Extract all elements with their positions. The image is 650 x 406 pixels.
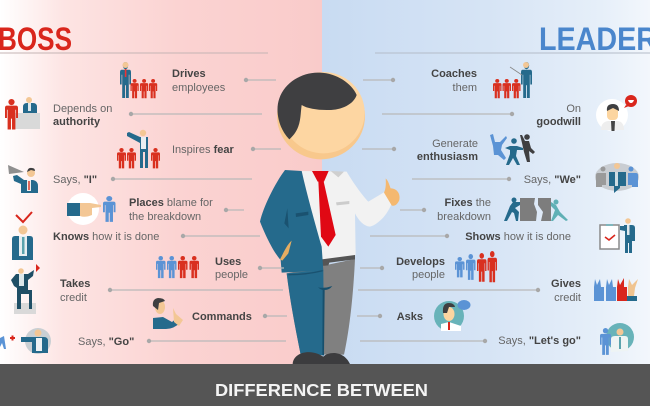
row: says lets go: [360, 335, 581, 347]
icon: boss pointing over employees: [117, 130, 160, 168]
row: develops people: people: [412, 269, 445, 281]
row: gives credit: [358, 278, 581, 304]
row: says we: Says, "We": [524, 174, 581, 186]
row: asks: [357, 311, 423, 323]
row: says we: [412, 174, 581, 186]
row: fixes the breakdown: Fixes the: [444, 197, 491, 209]
row: on goodwill: goodwill: [536, 116, 581, 128]
row: takes credit: Takes: [60, 278, 90, 290]
row: develops people: [360, 256, 445, 281]
footer title: DIFFERENCE BETWEEN: [215, 380, 428, 400]
icon: raised victory hands: [594, 278, 638, 301]
icon: man on step with flag: [11, 264, 40, 314]
row: fixes the breakdown: breakdown: [437, 211, 491, 223]
icon: boss ordering a worker: [0, 328, 51, 354]
icon: leader with clipboard: [600, 218, 635, 253]
row: coaches them: Coaches: [431, 68, 477, 80]
row: develops people: Develops: [396, 256, 445, 268]
row: on goodwill: On: [566, 103, 581, 115]
row: places blame: Places blame for: [129, 197, 213, 209]
icon: coach with pointer and three people: [493, 62, 532, 98]
row: asks: Asks: [397, 311, 423, 323]
row: commands: [192, 311, 287, 323]
row: inspires fear: Inspires fear: [172, 144, 234, 156]
row: depends on authority: [53, 103, 262, 128]
row: says lets go: Says, "Let's go": [498, 335, 581, 347]
row: drives employees: employees: [172, 82, 226, 94]
row: says go: Says, "Go": [78, 336, 134, 348]
icon: three jumping people: [490, 134, 535, 165]
row: shows how: [370, 231, 571, 243]
row: knows how: [53, 231, 260, 243]
icon: man with question bubble: [434, 300, 470, 331]
icon: boss with three employees: [120, 62, 157, 98]
row: generate enthusiasm: [362, 138, 478, 163]
row: gives credit: Gives: [551, 278, 581, 290]
row: drives employees: Drives: [172, 68, 206, 80]
icon: man with megaphone: [8, 165, 38, 193]
row: inspires fear: [172, 144, 281, 156]
heading: BOSS: BOSS: [0, 21, 72, 57]
row: fixes the breakdown: [400, 197, 491, 223]
row: depends on authority: Depends on: [53, 103, 112, 115]
row: places blame: the breakdown: [129, 211, 201, 223]
central figure: half boss, half leader: [260, 72, 400, 364]
row: uses people: [215, 256, 284, 281]
icon: four people: [156, 256, 199, 278]
row: says I: [53, 174, 252, 186]
row: shows how: Shows how it is done: [465, 231, 571, 243]
icon: man before a desk: [5, 97, 40, 129]
row: commands: Commands: [192, 311, 252, 323]
row: places blame: [129, 197, 244, 223]
row: says I: Says, "I": [53, 174, 97, 186]
row: takes credit: [60, 278, 283, 304]
row: uses people: people: [215, 269, 248, 281]
background: boss side: [0, 0, 322, 364]
icon: man pointing: [153, 298, 183, 329]
row: drives employees: [172, 68, 276, 94]
row: generate enthusiasm: Generate: [432, 138, 478, 150]
row: depends on authority: authority: [53, 116, 101, 128]
icon: team group: [595, 163, 639, 193]
row: coaches them: them: [453, 82, 477, 94]
icon: people growing in height: [455, 251, 497, 282]
row: takes credit: credit: [60, 292, 87, 304]
row: uses people: Uses: [215, 256, 241, 268]
icon: pointing hand and blue employee: [67, 193, 116, 225]
row: on goodwill: [382, 103, 581, 128]
row: coaches them: [363, 68, 477, 94]
icon: smiling leader with speech bubble: [596, 95, 637, 131]
footer bar: [0, 364, 650, 406]
row: says go: [78, 336, 286, 348]
row: knows how: Knows how it is done: [53, 231, 159, 243]
icon: bust with red check: [12, 212, 33, 260]
icon: leader and team member: [600, 323, 634, 355]
row: gives credit: credit: [554, 292, 581, 304]
icon: people pushing broken wall together: [504, 198, 568, 221]
row: generate enthusiasm: enthusiasm: [417, 151, 478, 163]
background: leader side: [322, 0, 650, 364]
